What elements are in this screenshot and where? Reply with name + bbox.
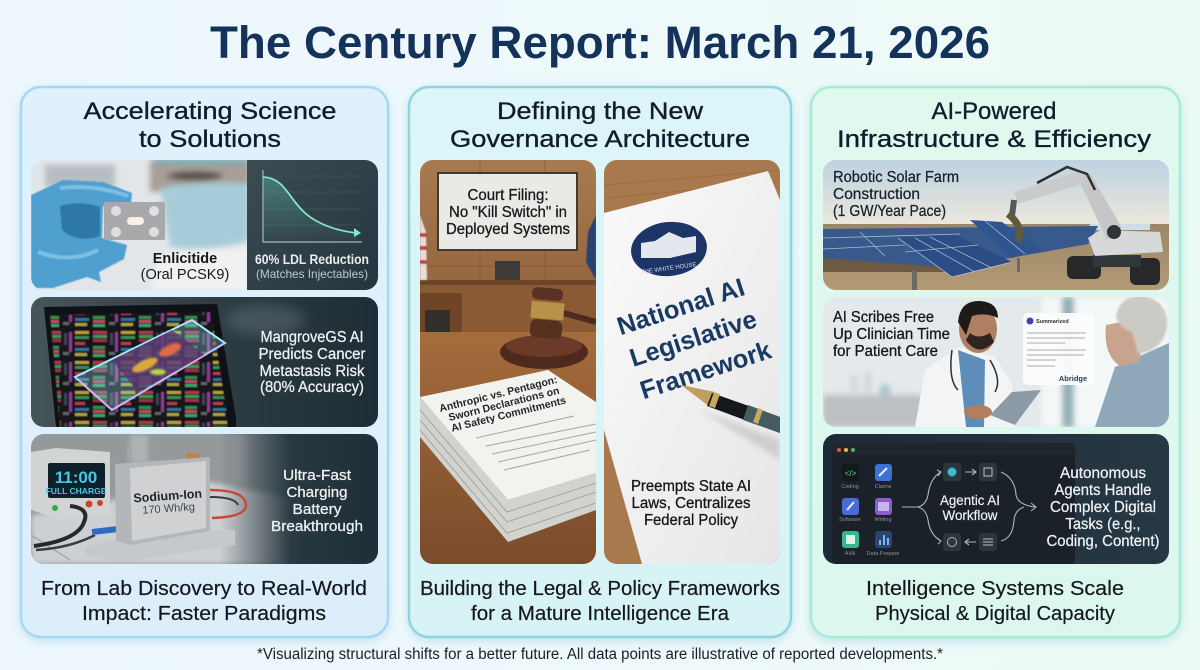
icon: gloved hand (31, 180, 132, 288)
card: agentic AI workflow (823, 434, 1169, 564)
icon: charger with display: FULL CHARGE (46, 486, 107, 496)
workflow arrows (902, 469, 1036, 545)
app window (832, 443, 1075, 564)
robotic excavator arm (1008, 167, 1163, 285)
icon: battery cell (115, 449, 235, 546)
footnote: *Visualizing structural shifts for a better future. All data points are illustrative of reported developments.* (257, 646, 943, 663)
app labels: Writing (874, 517, 892, 523)
card: sodium-ion battery (31, 434, 378, 564)
app labels: Data Prepare (867, 551, 899, 557)
label: Enlicitide: (Oral PCSK9) (141, 267, 229, 283)
sheet of paper (604, 171, 780, 564)
label: robotic solar farm: (1 GW/Year Pace) (833, 203, 946, 220)
solar panels (823, 220, 1098, 290)
card: court filing (420, 160, 596, 564)
label: AI scribes: for Patient Care (833, 343, 938, 360)
app icons: </> (845, 469, 857, 478)
window controls (837, 448, 855, 452)
summary popup: Abridge (1059, 374, 1087, 383)
label: autonomous agents: Complex Digital (1050, 499, 1156, 516)
label: ultra-fast charging: Breakthrough (271, 518, 363, 535)
heading: AI-Powered (932, 98, 1056, 125)
icon: gavel (500, 287, 596, 369)
summary popup: Summarized (1036, 319, 1069, 325)
label: ultra-fast charging: Battery (292, 501, 342, 518)
icon: cables (34, 490, 246, 550)
label: agentic workflow: Workflow (942, 508, 998, 523)
card: AI scribes (823, 296, 1169, 427)
label: MangroveGS: Metastasis Risk (260, 363, 365, 380)
battery label: Sodium-Ion (133, 487, 203, 505)
panel caption: for a Mature Intelligence Era (471, 603, 730, 625)
panel card (811, 87, 1180, 637)
bench (420, 285, 596, 314)
panel caption: Physical & Digital Capacity (875, 603, 1115, 625)
doctor (915, 301, 1041, 427)
icon: White House seal: THE WHITE HOUSE (641, 262, 697, 276)
label: autonomous agents: Tasks (e.g., (1066, 516, 1140, 533)
label: ultra-fast charging: Charging (286, 484, 348, 501)
card: MangroveGS AI (31, 297, 378, 427)
label: 60% LDL reduction: 60% LDL Reduction (255, 252, 369, 267)
document title: Framework (637, 336, 776, 405)
panel card (409, 87, 791, 637)
chart: LDL reduction curve (263, 170, 362, 242)
panel: governance architecture (409, 87, 791, 637)
document heading: AI Safety Commitments (450, 394, 567, 435)
document heading: Sworn Declarations on (447, 385, 561, 424)
heading: Governance Architecture (450, 126, 750, 153)
label: 60% LDL reduction: (Matches Injectables) (256, 267, 368, 281)
label: autonomous agents: Autonomous (1060, 465, 1146, 482)
label: Enlicitide: Enlicitide (153, 251, 217, 267)
dark chart background (247, 160, 378, 290)
panel caption: Intelligence Systems Scale (866, 578, 1124, 600)
app labels: Claims (875, 484, 892, 490)
panel card (21, 87, 388, 637)
card: robotic solar farm (823, 160, 1169, 290)
label: preempts state laws: Preempts State AI (631, 478, 751, 495)
document title: National AI (614, 274, 748, 341)
icon: fountain pen (681, 385, 780, 460)
table (420, 332, 596, 564)
app icons (842, 464, 892, 548)
document title: Legislative (626, 305, 760, 373)
icon: charger with display: 11:00 (55, 468, 97, 487)
label: ultra-fast charging: Ultra-Fast (283, 467, 352, 484)
workflow nodes (943, 463, 997, 551)
card: Enlicitide (31, 158, 378, 292)
label: robotic solar farm: Robotic Solar Farm (833, 169, 959, 186)
icon: blister pack (104, 202, 165, 240)
screen: court filing: Deployed Systems (446, 221, 570, 238)
app labels: Software (839, 517, 861, 523)
label: preempts state laws: Federal Policy (644, 512, 738, 529)
document heading: Anthropic vs. Pentagon: (438, 374, 559, 415)
screen: court filing: No "Kill Switch" in (449, 204, 567, 221)
icon: glowing tissue slide (75, 320, 225, 410)
laptop with genomic heatmap (44, 304, 236, 427)
summary popup (1023, 313, 1094, 385)
heading: Infrastructure & Efficiency (837, 126, 1152, 153)
patient (1095, 296, 1169, 427)
screen: court filing: Court Filing: (468, 187, 548, 204)
app labels: AI/A (845, 551, 856, 557)
title: The Century Report: March 21, 2026 (210, 17, 990, 68)
flags (420, 215, 596, 280)
label: MangroveGS: MangroveGS AI (260, 329, 364, 346)
document stack (420, 370, 596, 542)
panel: accelerating science to solutions (21, 87, 388, 637)
app labels: Coding (841, 484, 859, 490)
battery label: 170 Wh/kg (142, 501, 195, 517)
screen: court filing (438, 173, 577, 250)
label: robotic solar farm: Construction (833, 186, 920, 203)
panel: AI-powered infrastructure (811, 87, 1180, 637)
heading: Defining the New (497, 98, 703, 125)
label: MangroveGS: Predicts Cancer (258, 346, 366, 363)
label: agentic workflow: Agentic AI (940, 493, 1000, 508)
panel caption: Building the Legal & Policy Frameworks (420, 578, 780, 600)
heading: Accelerating Science (84, 98, 336, 125)
label: MangroveGS: (80% Accuracy) (260, 379, 364, 396)
icon: charger with display (31, 448, 110, 519)
heading: to Solutions (139, 126, 281, 153)
panel caption: Impact: Faster Paradigms (82, 603, 326, 625)
icon: White House seal (631, 222, 707, 276)
label: AI scribes: Up Clinician Time (833, 326, 950, 343)
label: AI scribes: AI Scribes Free (833, 309, 934, 326)
card: national AI framework (604, 160, 780, 564)
label: autonomous agents: Agents Handle (1054, 482, 1152, 499)
label: preempts state laws: Laws, Centralizes (632, 495, 751, 512)
label: autonomous agents: Coding, Content) (1046, 533, 1160, 550)
panel caption: From Lab Discovery to Real-World (41, 578, 367, 600)
